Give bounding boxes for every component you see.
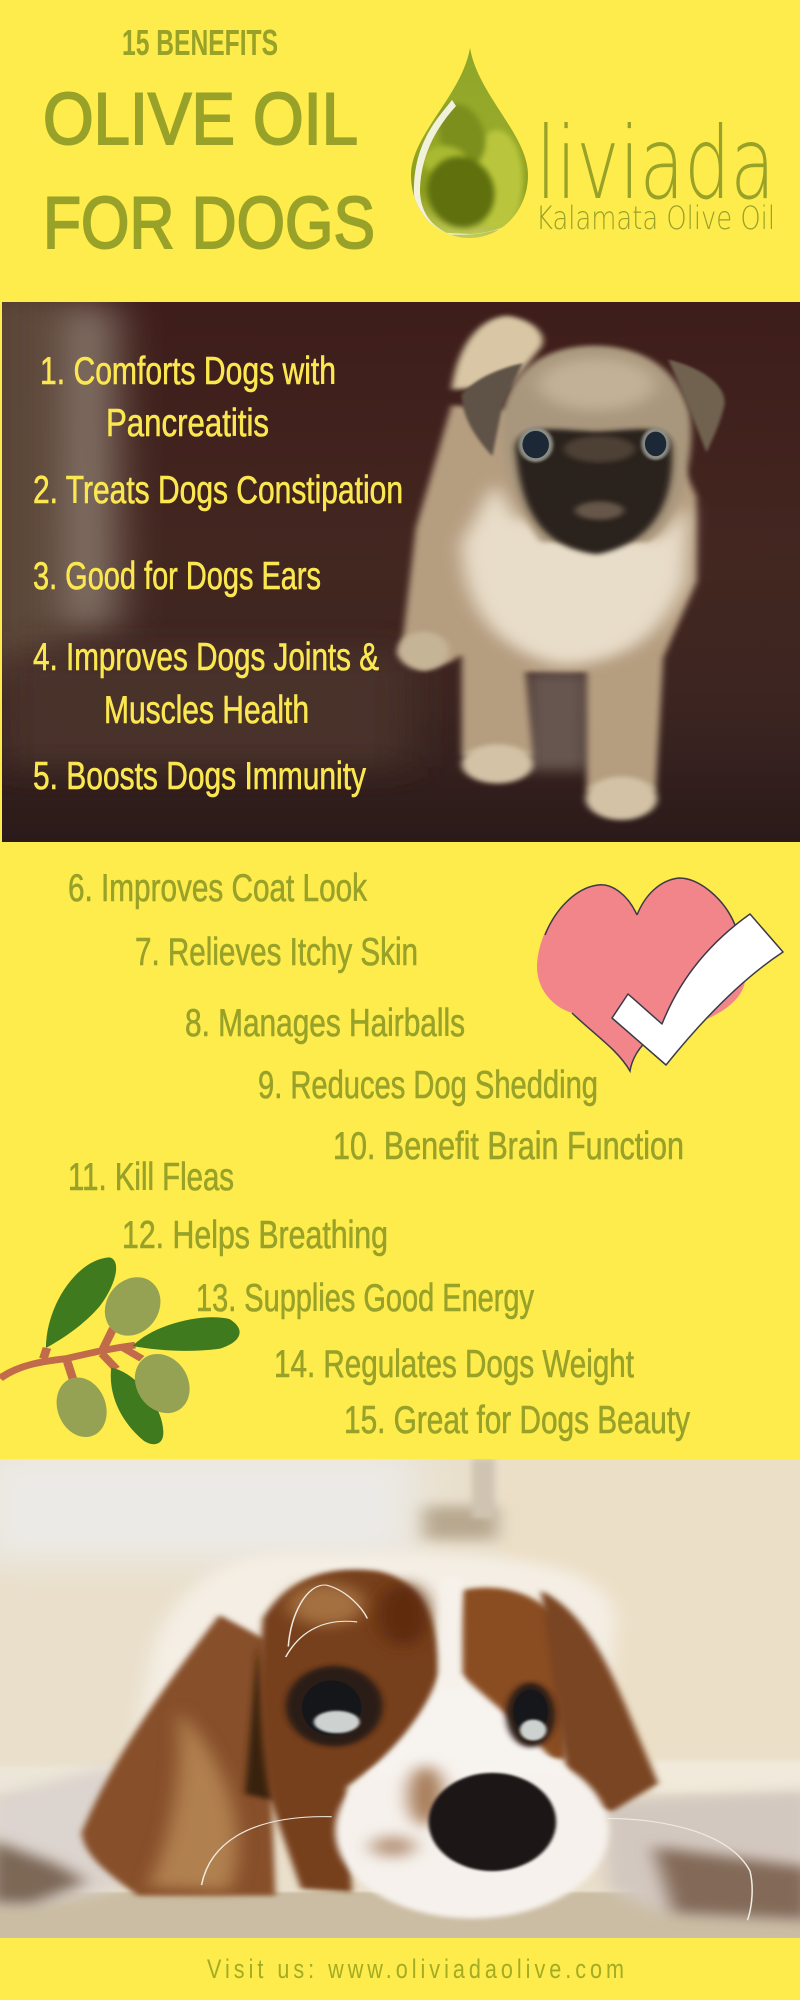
branch <box>0 1328 142 1382</box>
benefit 9: 9. Reduces Dog Shedding <box>258 1064 598 1107</box>
benefit 15: 15. Great for Dogs Beauty <box>344 1399 690 1442</box>
benefit 1 second line: Pancreatitis <box>106 402 269 445</box>
leaf: top <box>46 1257 116 1348</box>
benefit 3: 3. Good for Dogs Ears <box>33 555 321 598</box>
benefit 13: 13. Supplies Good Energy <box>196 1277 534 1320</box>
whiskers <box>202 1585 752 1920</box>
benefit 4 second line: Muscles Health <box>104 689 309 732</box>
benefit 8: 8. Manages Hairballs <box>185 1002 465 1045</box>
benefit 4: 4. Improves Dogs Joints & <box>33 636 379 679</box>
title: olive oil: OLIVE OIL <box>43 79 358 160</box>
panel: pug photo with benefits 1-5 <box>0 286 800 842</box>
paws <box>0 1769 118 1910</box>
photo: spaniel resting head on carpet <box>0 1450 800 1941</box>
olive: top <box>97 1273 168 1340</box>
icon: olive branch <box>0 1257 240 1444</box>
ears <box>462 363 523 456</box>
white head fur <box>133 1552 616 1818</box>
left eye <box>286 1666 383 1747</box>
benefit 11: 11. Kill Fleas <box>68 1156 234 1199</box>
subtitle: 15 benefits: 15 BENEFITS <box>122 22 278 63</box>
title: for dogs: FOR DOGS <box>43 183 375 264</box>
benefit 7: 7. Relieves Itchy Skin <box>135 931 418 974</box>
leaf: right <box>133 1317 240 1351</box>
eyes <box>518 427 553 462</box>
nose <box>429 1773 556 1871</box>
body <box>399 405 696 791</box>
right ear <box>541 1590 658 1811</box>
benefit 6: 6. Improves Coat Look <box>68 867 367 910</box>
tail <box>452 316 543 389</box>
benefit 2: 2. Treats Dogs Constipation <box>33 469 403 512</box>
benefit 14: 14. Regulates Dogs Weight <box>274 1343 634 1386</box>
muzzle <box>335 1743 609 1918</box>
white blaze <box>440 1576 462 1689</box>
benefit 10: 10. Benefit Brain Function <box>333 1125 684 1168</box>
benefit 12: 12. Helps Breathing <box>122 1214 388 1257</box>
paws <box>398 632 449 670</box>
title block <box>43 22 375 264</box>
right eye <box>506 1683 555 1747</box>
olive: right <box>127 1349 197 1418</box>
benefit 1: 1. Comforts Dogs with <box>40 350 336 393</box>
right face patch <box>458 1588 566 1759</box>
footer: website: Visit us: www.oliviadaolive.com <box>207 1954 628 1984</box>
photo: pug puppy on wooden floor <box>0 286 800 842</box>
head <box>502 346 691 542</box>
face mask <box>515 429 672 554</box>
benefit 5: 5. Boosts Dogs Immunity <box>33 755 366 798</box>
icon: heart with check mark <box>537 878 783 1071</box>
chest <box>462 482 689 665</box>
olive: left <box>51 1374 112 1440</box>
left ear <box>82 1615 276 1896</box>
left face patch <box>260 1569 439 1892</box>
logo: Oliviada <box>411 48 775 239</box>
leaf: bottom <box>111 1368 163 1444</box>
panel: benefits 6-15 <box>68 867 690 1442</box>
icon: olive oil drop <box>411 48 528 239</box>
